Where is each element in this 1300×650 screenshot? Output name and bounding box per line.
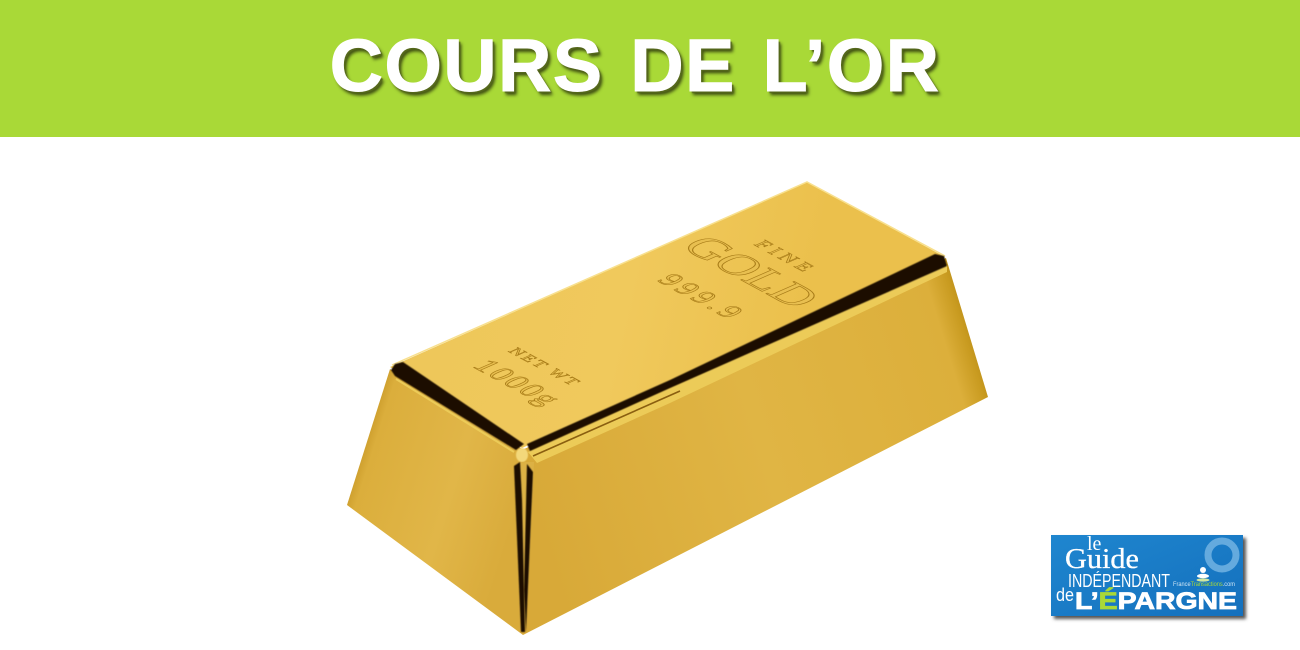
logo: le Guide indépendant de l'épargne [1051, 533, 1246, 619]
left face [347, 369, 524, 635]
right face [522, 258, 988, 635]
logo text: FranceTransactions.com: FranceTransactions.com [1173, 582, 1235, 588]
logo shadow [1054, 538, 1246, 619]
engraving: 1000g: 1000g [465, 356, 570, 410]
logo text: Guide: Guide [1065, 543, 1139, 575]
logo ring [1208, 541, 1236, 569]
front edge light reflection [396, 379, 514, 452]
logo text: L'ÉPARGNE: L’ÉPARGNE [1075, 587, 1237, 615]
engraving: 999.9: 999.9 [650, 270, 754, 324]
gold bar [347, 182, 988, 635]
corner highlight [516, 448, 528, 462]
engraving: GOLD: GOLD [670, 230, 832, 314]
green banner [0, 0, 1300, 137]
long edge light strip [528, 265, 947, 463]
top face [390, 182, 945, 448]
engraving: NET WT: NET WT [504, 346, 585, 388]
long edge thin secondary line [533, 391, 680, 456]
front edge: dark band [391, 362, 524, 450]
engraving: FINE: FINE [749, 238, 823, 276]
logo text: de: de [1056, 585, 1074, 605]
logo text: le: le [1087, 533, 1102, 555]
long edge: dark band [527, 254, 947, 451]
logo text: INDÉPENDANT: INDÉPENDANT [1068, 571, 1170, 591]
vertical edge: left dark stripe [514, 462, 525, 632]
logo icon: people [1196, 567, 1210, 582]
logo background [1051, 535, 1243, 616]
vertical edge: gold strip [520, 462, 534, 632]
top face back highlight [392, 182, 945, 365]
title: COURS DE L’OR [330, 24, 940, 107]
vertical edge: right dark stripe [524, 464, 533, 632]
